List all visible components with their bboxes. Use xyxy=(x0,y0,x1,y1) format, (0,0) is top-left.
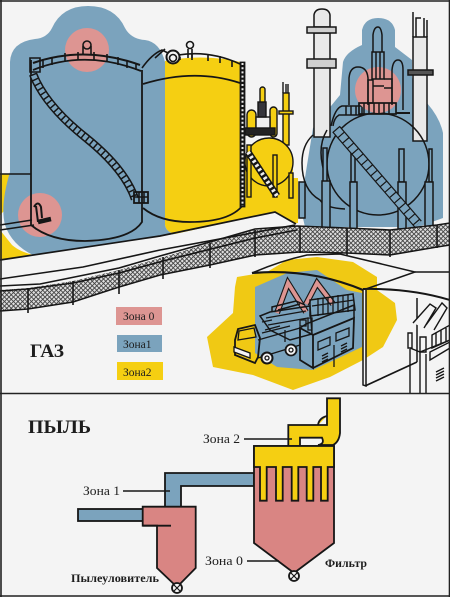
roads and fence rails xyxy=(0,212,450,313)
label: filter: Фильтр xyxy=(325,556,367,570)
white distillation towers xyxy=(307,9,433,141)
chain-link fence xyxy=(0,223,450,311)
zone callouts xyxy=(83,432,292,568)
zone callouts: Зона 0 xyxy=(205,554,243,568)
legend: Зона1 xyxy=(123,339,152,351)
dust collector diagram: filter and fan xyxy=(254,398,340,581)
heading: gas: ГАЗ xyxy=(30,342,64,362)
canopy shelter xyxy=(252,254,450,386)
hazard zones: gas area backdrop xyxy=(0,6,443,260)
zone callouts: Зона 2 xyxy=(203,432,240,446)
Zone 0 process unit on top of sphere xyxy=(349,27,403,114)
second yellow tank xyxy=(142,42,245,222)
label: dust separator: Пылеуловитель xyxy=(71,571,160,585)
small yellow sphere unit xyxy=(245,82,293,198)
large storage tank with Zone 0 spots xyxy=(0,28,148,241)
partially visible machine at right edge xyxy=(408,303,450,393)
dust collector diagram: cyclone xyxy=(78,473,254,593)
legend: Зона 0 xyxy=(123,311,155,323)
legend xyxy=(116,307,163,380)
legend: Зона2 xyxy=(123,367,152,379)
truck and cabinet xyxy=(234,283,355,368)
blue spheres with stair and legs xyxy=(299,106,433,230)
zone callouts: Зона 1 xyxy=(83,484,120,498)
zones behind mobile substation xyxy=(207,257,397,390)
heading: dust: ПЫЛЬ xyxy=(28,417,91,438)
